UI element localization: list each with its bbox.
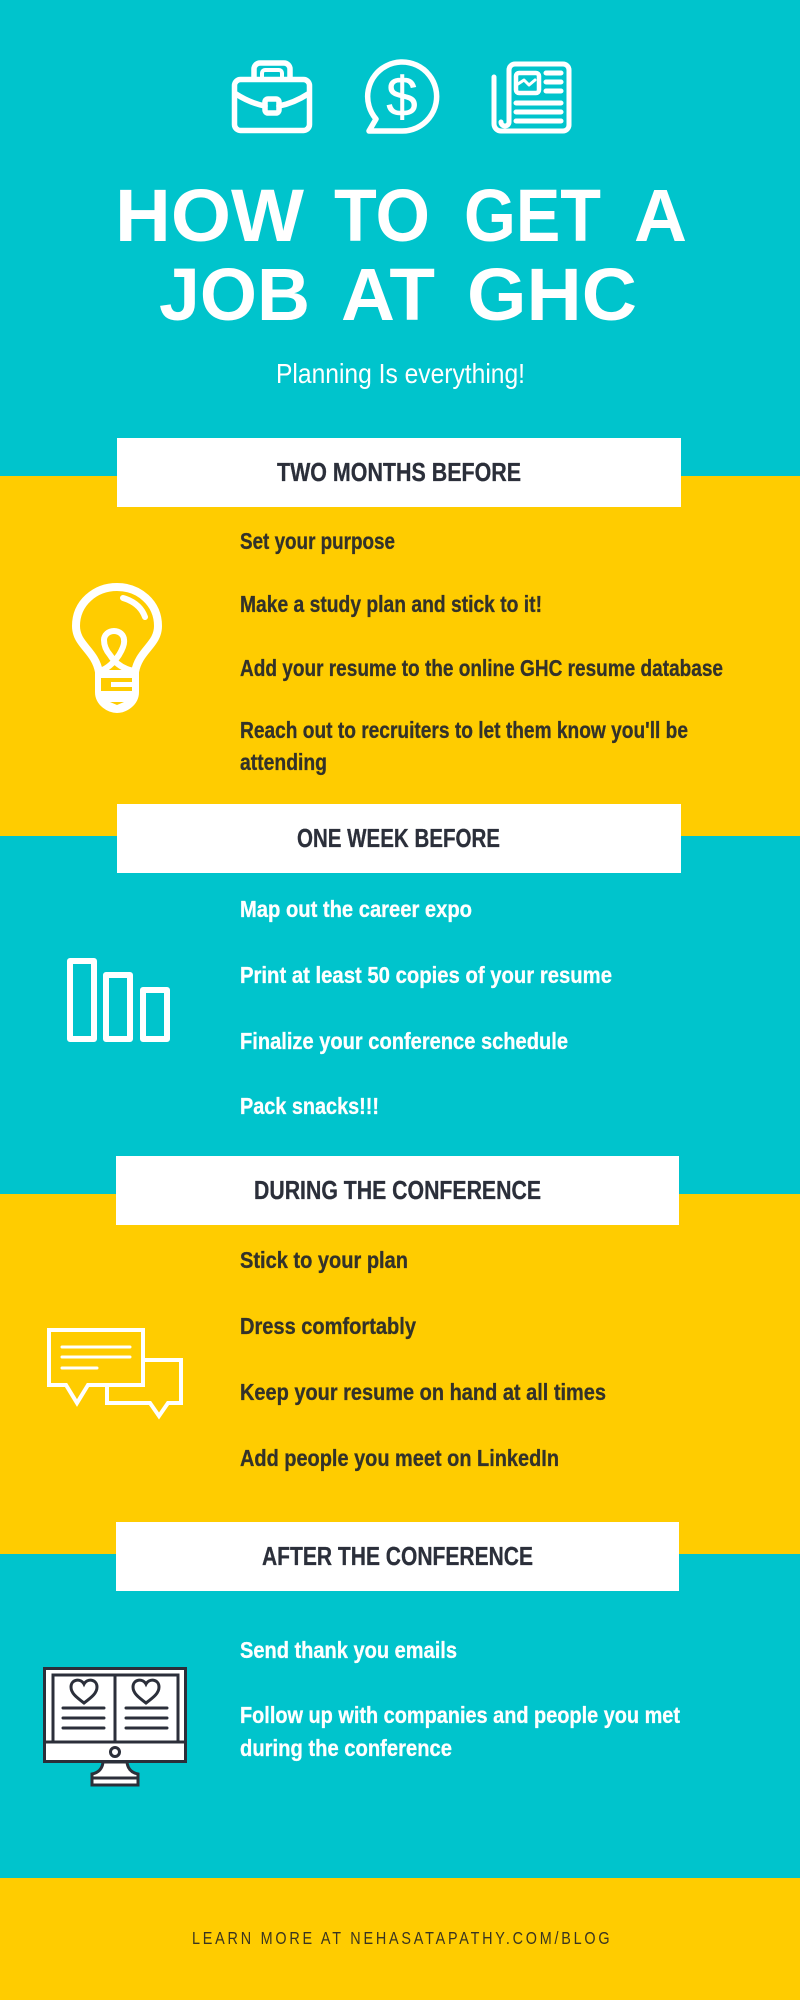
- icon: briefcase: [234, 63, 310, 130]
- panel: one week before: [0, 804, 800, 1194]
- checklist: two months before: Reach out to recruiters to let them know you'll be: [240, 717, 688, 743]
- checklist: after the conference: [240, 1637, 680, 1761]
- checklist: two months before: [240, 528, 723, 775]
- subtitle: Planning Is everything!: [276, 358, 525, 389]
- checklist: one week before: [240, 896, 612, 1119]
- icon: light bulb: [76, 587, 158, 711]
- title: HOW: [115, 174, 304, 257]
- heading box: [116, 1522, 679, 1591]
- heading box: [117, 438, 681, 507]
- checklist: after the conference: Follow up with companies and people you met: [240, 1702, 680, 1728]
- title: [115, 174, 687, 336]
- checklist: one week before: Print at least 50 copies of your resume: [240, 962, 612, 988]
- checklist: one week before: Finalize your conference schedule: [240, 1028, 568, 1054]
- icon: dollar speech bubble: $: [386, 65, 418, 128]
- checklist: during the conference: Add people you meet on LinkedIn: [240, 1445, 559, 1471]
- footer: [0, 1878, 800, 2000]
- title: GET: [464, 174, 601, 257]
- checklist: two months before: Make a study plan and stick to it!: [240, 591, 542, 617]
- heading box: AFTER THE CONFERENCE: [262, 1541, 533, 1571]
- title: AT: [341, 253, 435, 336]
- heading box: ONE WEEK BEFORE: [297, 823, 500, 853]
- panel: during the conference: [0, 1156, 800, 1554]
- checklist: during the conference: Stick to your plan: [240, 1247, 408, 1273]
- title: JOB: [159, 253, 310, 336]
- heading box: [116, 1156, 679, 1225]
- title: A: [634, 174, 687, 257]
- checklist: during the conference: Keep your resume on hand at all times: [240, 1379, 606, 1405]
- icon: bars: [70, 961, 167, 1039]
- heading box: [117, 804, 681, 873]
- checklist: after the conference: Send thank you emails: [240, 1637, 457, 1663]
- panel: after the conference: [0, 1522, 800, 1878]
- icon: dollar speech bubble: [368, 62, 437, 131]
- header panel: [0, 0, 800, 476]
- checklist: two months before: attending: [240, 749, 327, 775]
- title: GHC: [467, 253, 637, 336]
- footer: LEARN MORE AT NEHASATAPATHY.COM/BLOG: [192, 1929, 610, 1948]
- checklist: during the conference: Dress comfortably: [240, 1313, 416, 1339]
- panel: two months before: [0, 438, 800, 836]
- checklist: one week before: Pack snacks!!!: [240, 1093, 379, 1119]
- icon: newspaper: [494, 64, 569, 131]
- checklist: two months before: Set your purpose: [240, 528, 395, 554]
- heading box: DURING THE CONFERENCE: [254, 1175, 541, 1205]
- checklist: after the conference: during the conference: [240, 1735, 452, 1761]
- checklist: during the conference: [240, 1247, 606, 1471]
- title: TO: [334, 174, 430, 257]
- checklist: one week before: Map out the career expo: [240, 896, 472, 922]
- heading box: TWO MONTHS BEFORE: [277, 457, 521, 487]
- icon: chat bubbles: [49, 1330, 181, 1416]
- icon: monitor: [44, 1668, 186, 1785]
